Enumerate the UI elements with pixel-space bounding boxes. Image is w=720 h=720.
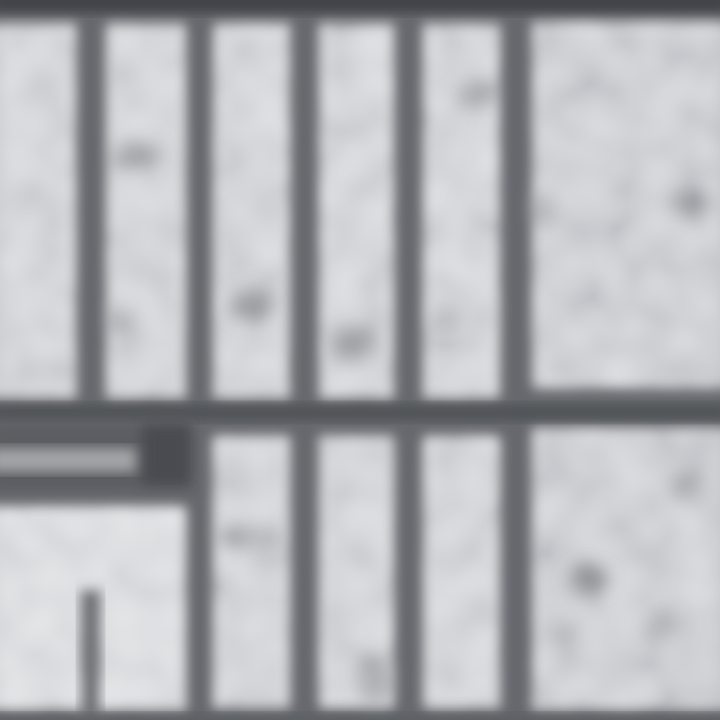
mottled texture xyxy=(106,81,706,706)
heading text placeholder xyxy=(0,448,136,472)
top dark band xyxy=(0,0,720,13)
bottom edge band xyxy=(0,714,720,720)
dark heading block xyxy=(0,424,194,490)
lower left vertical bar xyxy=(80,590,101,720)
panels: top row xyxy=(0,22,720,398)
panels: bottom row xyxy=(0,428,720,710)
horizontal divider xyxy=(0,404,720,421)
